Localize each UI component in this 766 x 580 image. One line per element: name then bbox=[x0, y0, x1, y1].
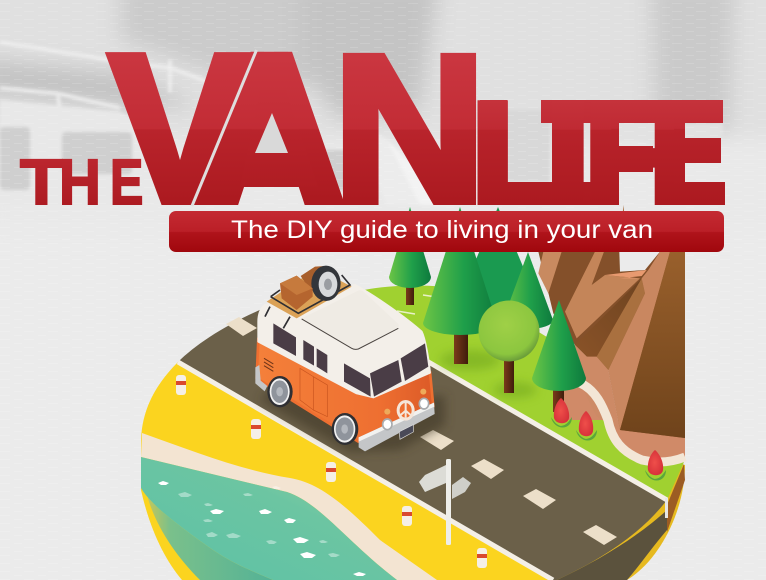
road centre dashes bbox=[226, 317, 617, 545]
van body bbox=[257, 338, 433, 442]
title: The Van Life bbox=[20, 10, 727, 246]
beach: yellow sand bbox=[141, 362, 553, 580]
tulip 1 bbox=[551, 398, 572, 428]
tan middle strip bbox=[565, 252, 640, 338]
flower decal bbox=[384, 409, 390, 415]
word: THE: H bbox=[59, 146, 101, 218]
hatch shadow line bbox=[302, 319, 398, 349]
lower terracotta slope bbox=[563, 345, 620, 430]
roof rack bbox=[267, 268, 352, 318]
van vents bbox=[264, 358, 273, 371]
road side wall bbox=[557, 510, 667, 580]
island base: yellow rim bbox=[400, 400, 685, 580]
roadside bollards bbox=[176, 375, 487, 568]
signpost bbox=[419, 459, 471, 545]
word: LIFE bbox=[467, 70, 727, 236]
headlights bbox=[383, 398, 429, 430]
subtitle banner: The DIY guide to living in your van bbox=[231, 216, 653, 244]
licence plate bbox=[399, 425, 413, 439]
A crossbar reinforcement bbox=[240, 90, 318, 187]
pale sand strip bbox=[141, 433, 437, 580]
water sparkles bbox=[158, 481, 366, 576]
soil side wall bbox=[667, 464, 685, 532]
orange camper van bbox=[255, 266, 435, 451]
shadow: trees bbox=[440, 350, 537, 398]
rack rails bbox=[265, 275, 350, 328]
word: THE: T bbox=[20, 147, 63, 218]
ligature bars bbox=[480, 100, 725, 205]
tulip 2 bbox=[576, 411, 597, 440]
van windows bbox=[273, 323, 428, 397]
peak tip behind title bbox=[620, 205, 628, 252]
road bbox=[178, 300, 667, 580]
word: LIFE: F bbox=[583, 71, 661, 236]
flower decal right bbox=[420, 389, 426, 395]
tree: front pine bbox=[532, 300, 586, 412]
van door bbox=[300, 368, 327, 417]
tree: rear pine bbox=[503, 252, 553, 329]
word: THE: E bbox=[110, 147, 143, 218]
subtitle banner bbox=[169, 211, 724, 252]
ridge face bbox=[608, 252, 670, 430]
rear bumper bbox=[255, 365, 267, 391]
sky gap between peaks bbox=[619, 252, 660, 272]
rear suitcase bbox=[301, 266, 327, 290]
brown mountains bbox=[538, 205, 685, 438]
gap between V and A bbox=[192, 50, 256, 206]
word: VAN: N bbox=[333, 11, 486, 245]
front bumper bbox=[359, 403, 435, 451]
word: LIFE: I bbox=[541, 70, 595, 235]
tree: small back pine bbox=[389, 207, 431, 305]
word: VAN bbox=[109, 10, 486, 246]
suitcase top bbox=[280, 276, 313, 295]
terracotta ground bbox=[552, 340, 685, 462]
tulip 3 bbox=[645, 450, 666, 480]
tree: big pine bbox=[423, 207, 497, 364]
rear wheel bbox=[267, 376, 293, 407]
water side wall bbox=[141, 488, 273, 580]
word: LIFE: L bbox=[467, 70, 580, 235]
medium gully face bbox=[597, 278, 645, 370]
word: THE bbox=[20, 146, 143, 218]
front wheel bbox=[332, 413, 358, 445]
ridge highlight bbox=[605, 270, 647, 278]
word: VAN: V bbox=[109, 10, 250, 246]
green meadow bbox=[340, 286, 684, 500]
grass marks bbox=[397, 295, 443, 314]
road white edges bbox=[178, 360, 667, 580]
main cliff face bbox=[620, 252, 685, 438]
van shadow bbox=[260, 360, 445, 452]
road edge end post bbox=[665, 498, 668, 518]
isometric island scene bbox=[141, 205, 685, 580]
roof hatch bbox=[302, 290, 399, 349]
mountain dark mass bbox=[538, 252, 685, 438]
dark gully face bbox=[575, 278, 642, 357]
tan back strip bbox=[538, 252, 562, 293]
A counter bbox=[255, 113, 288, 153]
peace symbol bbox=[397, 400, 415, 421]
white van upper bbox=[258, 285, 430, 397]
word: VAN: A bbox=[201, 14, 342, 243]
front suitcase bbox=[280, 276, 313, 310]
tree: round tree bbox=[478, 300, 540, 393]
beige footpath bbox=[580, 383, 685, 462]
water surface bbox=[141, 457, 397, 580]
tree: rear tall pine bbox=[459, 207, 537, 312]
spare tyre bbox=[311, 266, 341, 301]
bumper highlight bbox=[359, 403, 434, 442]
word: LIFE: E bbox=[648, 71, 727, 236]
